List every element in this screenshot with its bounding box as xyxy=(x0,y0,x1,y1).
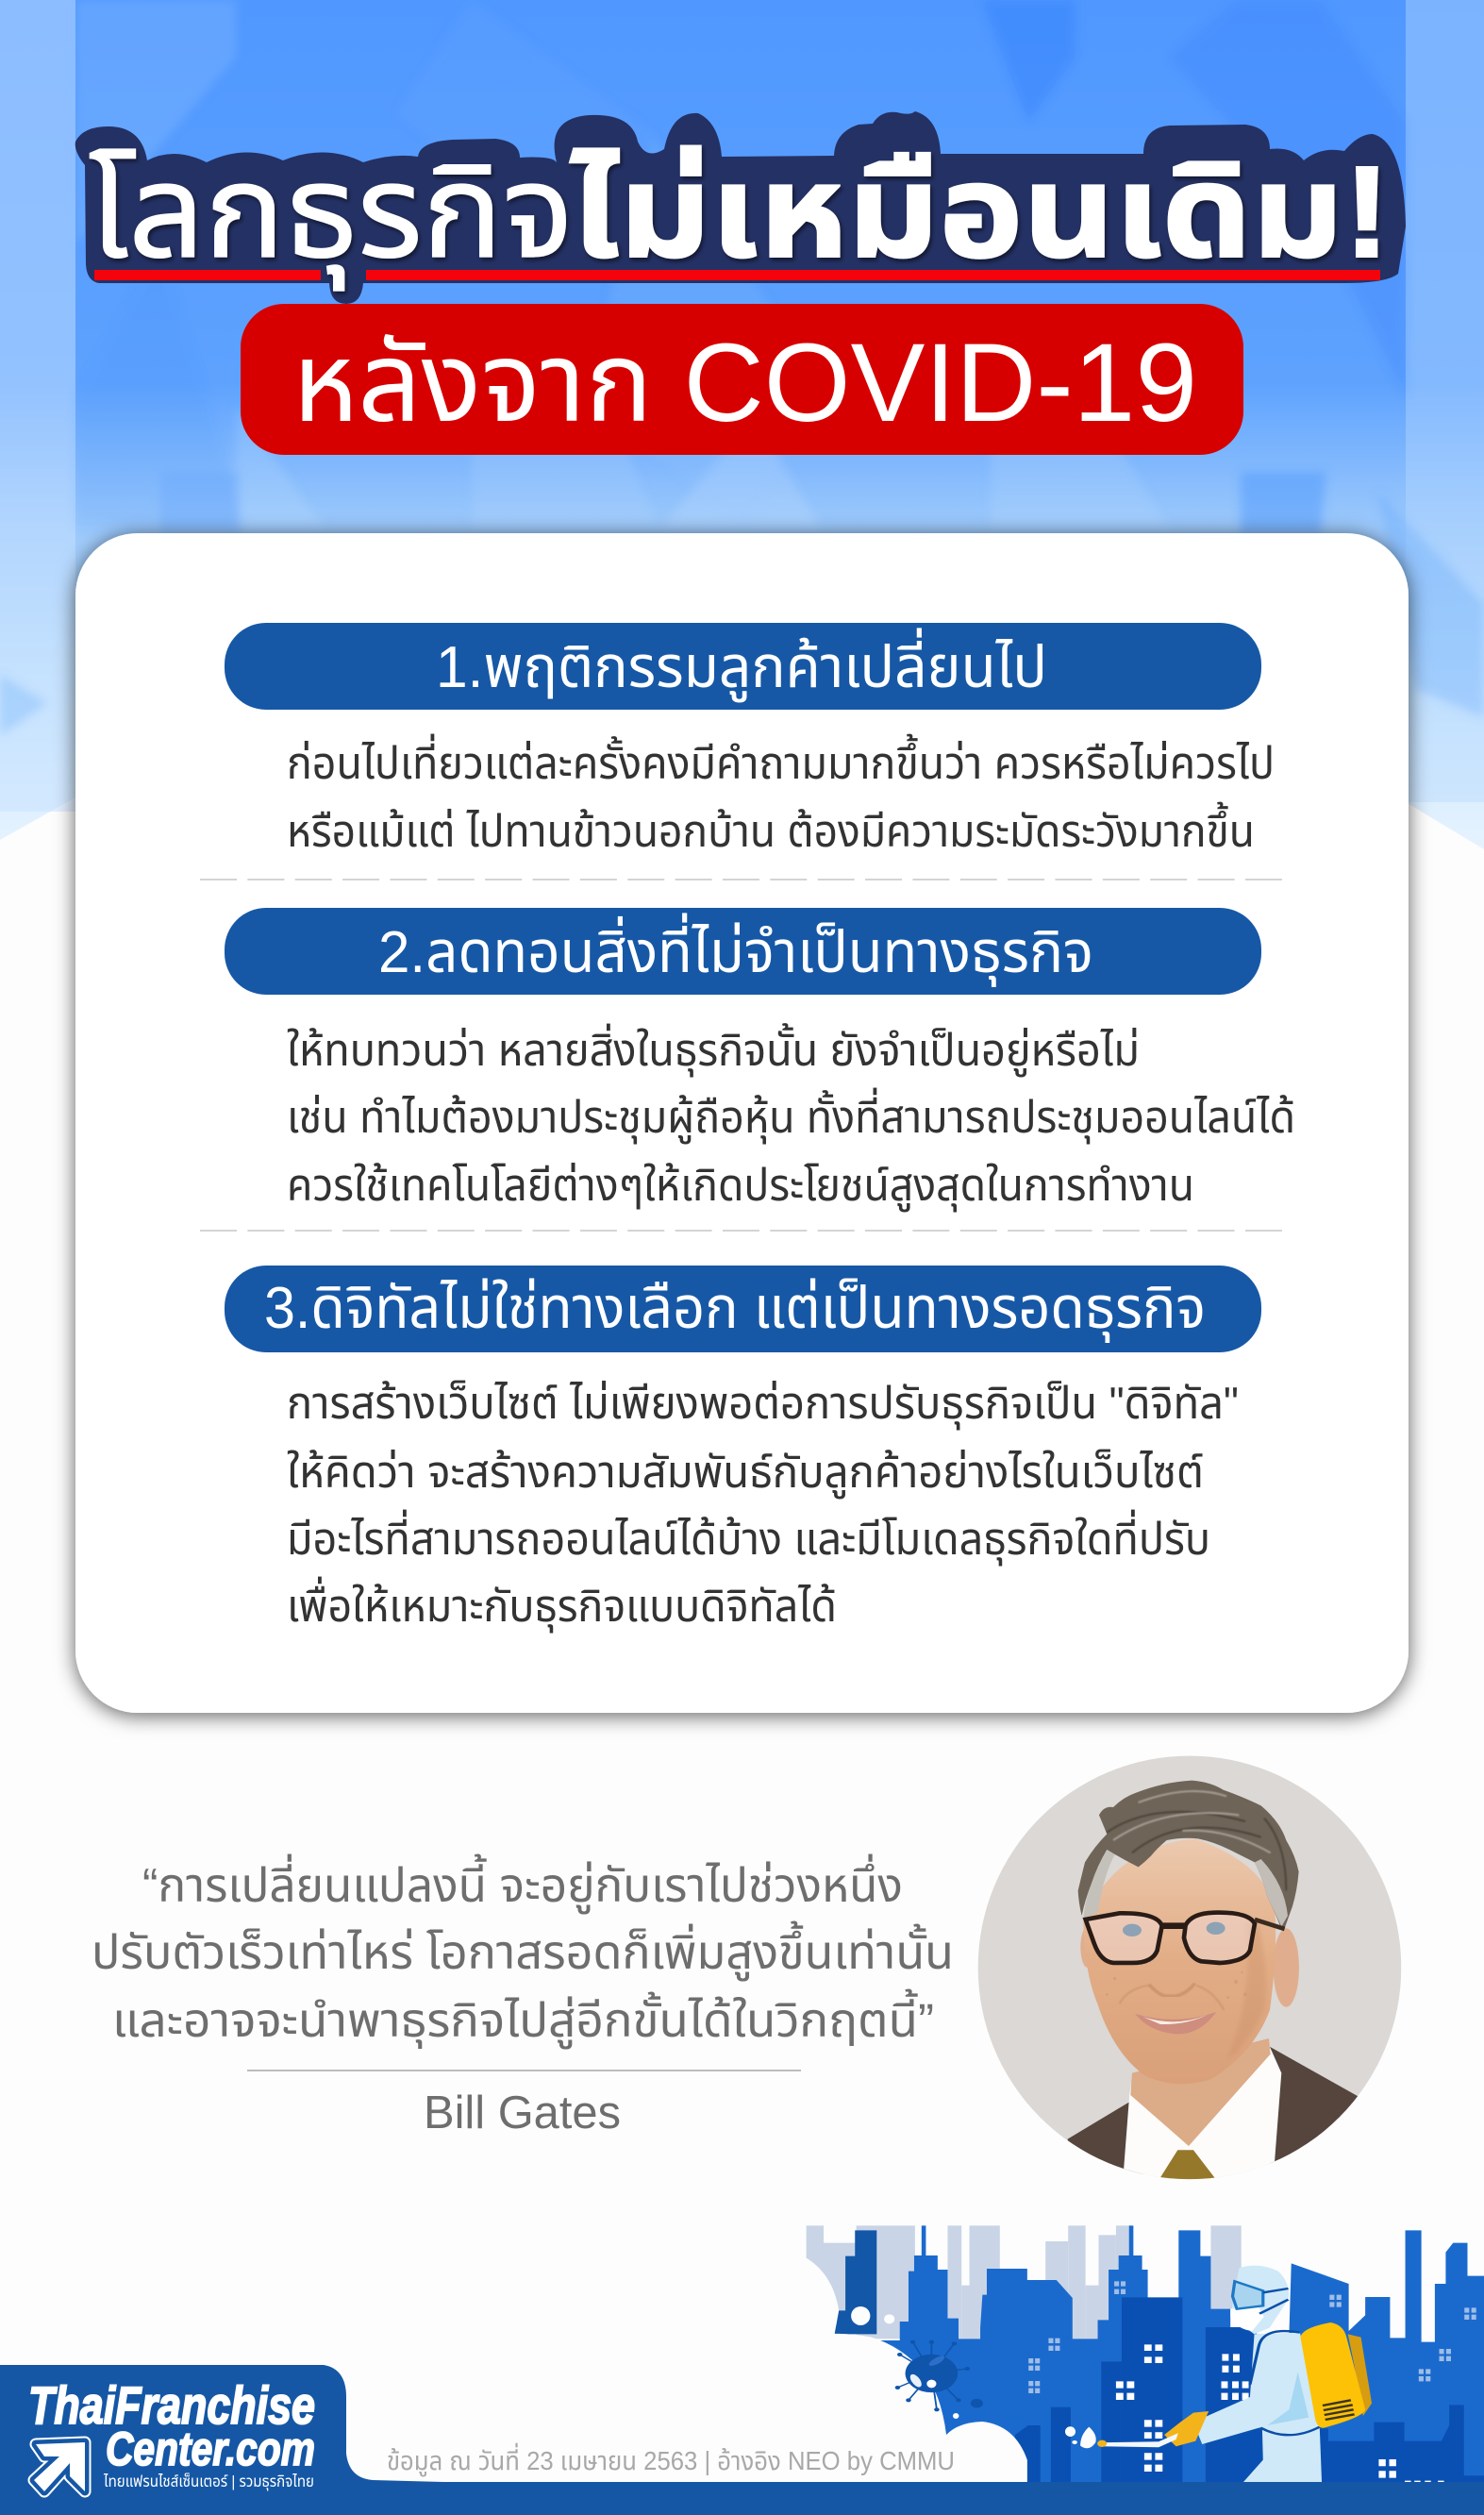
body text 3: มีอะไรที่สามารถออนไลน์ได้บ้าง และมีโมเดลธุรกิจใดที่ปรับ xyxy=(287,1509,1210,1566)
glove and sprayer xyxy=(1164,2411,1209,2446)
hair xyxy=(1078,1781,1299,1928)
foreground dark buildings xyxy=(1015,2297,1484,2482)
heading pill 1 xyxy=(225,623,1261,710)
bottom blue band with logo panel xyxy=(0,2365,1484,2515)
heading pill 2: 2.ลดทอนสิ่งที่ไม่จำเป็นทางธุรกิจ xyxy=(378,913,1093,987)
body text 1: ก่อนไปเที่ยวแต่ละครั้งคงมีคำถามมากขึ้นว่า ควรหรือไม่ควรไป xyxy=(287,733,1275,788)
yellow tank xyxy=(1348,2334,1372,2416)
main white card xyxy=(75,533,1409,1713)
icon: arrow xyxy=(34,2442,85,2491)
skyline illustration xyxy=(802,2225,1484,2483)
quote block xyxy=(92,1853,954,2138)
quote attribution: Bill Gates xyxy=(424,2087,621,2138)
body text 1: หรือแม้แต่ ไปทานข้าวนอกบ้าน ต้องมีความระมัดระวังมากขึ้น xyxy=(287,801,1255,856)
heading pill 3: 3.ดิจิทัลไม่ใช่ทางเลือก แต่เป็นทางรอดธุรกิจ xyxy=(264,1276,1206,1343)
person in protective suit xyxy=(1065,2266,1372,2482)
body text 2 xyxy=(287,1023,1295,1212)
body text 1 xyxy=(287,733,1275,856)
quote block: “การเปลี่ยนแปลงนี้ จะอยู่กับเราไปช่วงหนึ่ง xyxy=(142,1853,903,1914)
heading pill 1: 1.พฤติกรรมลูกค้าเปลี่ยนไป xyxy=(436,628,1047,703)
subtitle banner: หลังจาก COVID-19 xyxy=(292,321,1197,445)
icon: virus xyxy=(895,2340,983,2411)
body text 3: เพื่อให้เหมาะกับธุรกิจแบบดิจิทัลได้ xyxy=(287,1576,837,1633)
harness strap xyxy=(1250,2331,1320,2435)
body text 3 xyxy=(287,1378,1239,1633)
pale windows xyxy=(1028,2281,1476,2393)
portrait photo xyxy=(975,1752,1406,2183)
title: navy outline block xyxy=(75,111,1406,304)
hood xyxy=(1230,2266,1289,2334)
logo: ThaiFranchise Center.com xyxy=(28,2375,315,2491)
clouds xyxy=(802,2255,1027,2482)
body text 2: ให้ทบทวนว่า หลายสิ่งในธุรกิจนั้น ยังจำเป็นอยู่หรือไม่ xyxy=(287,1023,1140,1077)
section 2 xyxy=(225,908,1295,1212)
title: navy outline block: ไม่เหมือนเดิม! xyxy=(570,140,1391,285)
logo: ThaiFranchise Center.com: ThaiFranchise xyxy=(28,2375,315,2435)
windows xyxy=(1116,2344,1444,2483)
section 3 xyxy=(225,1266,1261,1633)
body text 2: เช่น ทำไมต้องมาประชุมผู้ถือหุ้น ทั้งที่สามารถประชุมออนไลน์ได้ xyxy=(287,1087,1295,1144)
tie xyxy=(1159,2150,1216,2180)
body text 3: การสร้างเว็บไซต์ ไม่เพียงพอต่อการปรับธุรกิจเป็น "ดิจิทัล" xyxy=(287,1378,1239,1430)
body text 2: ควรใช้เทคโนโลยีต่างๆให้เกิดประโยชน์สูงสุดในการทำงาน xyxy=(287,1160,1194,1212)
background pale buildings xyxy=(807,2225,1242,2340)
suit body xyxy=(1193,2333,1322,2482)
logo: ThaiFranchise Center.com: Center.com xyxy=(106,2423,315,2475)
body text 3: ให้คิดว่า จะสร้างความสัมพันธ์กับลูกค้าอย่างไรในเว็บไซต์ xyxy=(287,1447,1204,1499)
quote block: ปรับตัวเร็วเท่าไหร่ โอกาสรอดก็เพิ่มสูงขึ้นเท่านั้น xyxy=(92,1920,954,1981)
mask xyxy=(1230,2307,1264,2331)
glasses xyxy=(1086,1913,1285,1963)
section 1 xyxy=(225,623,1275,856)
heading pill 2 xyxy=(225,908,1261,995)
quote block: และอาจจะนำพาธุรกิจไปสู่อีกขั้นได้ในวิกฤตนี้” xyxy=(112,1988,934,2049)
goggles xyxy=(1232,2281,1263,2309)
smile xyxy=(1135,2012,1216,2034)
source credit: ข้อมูล ณ วันที่ 23 เมษายน 2563 | อ้างอิง NEO by CMMU xyxy=(387,2442,955,2477)
title: navy outline block: โลกธุรกิจ xyxy=(89,140,574,291)
logo: ThaiFranchise Center.com: ไทยแฟรนไชส์เซ็นเตอร์ | รวมธุรกิจไทย xyxy=(103,2473,314,2491)
